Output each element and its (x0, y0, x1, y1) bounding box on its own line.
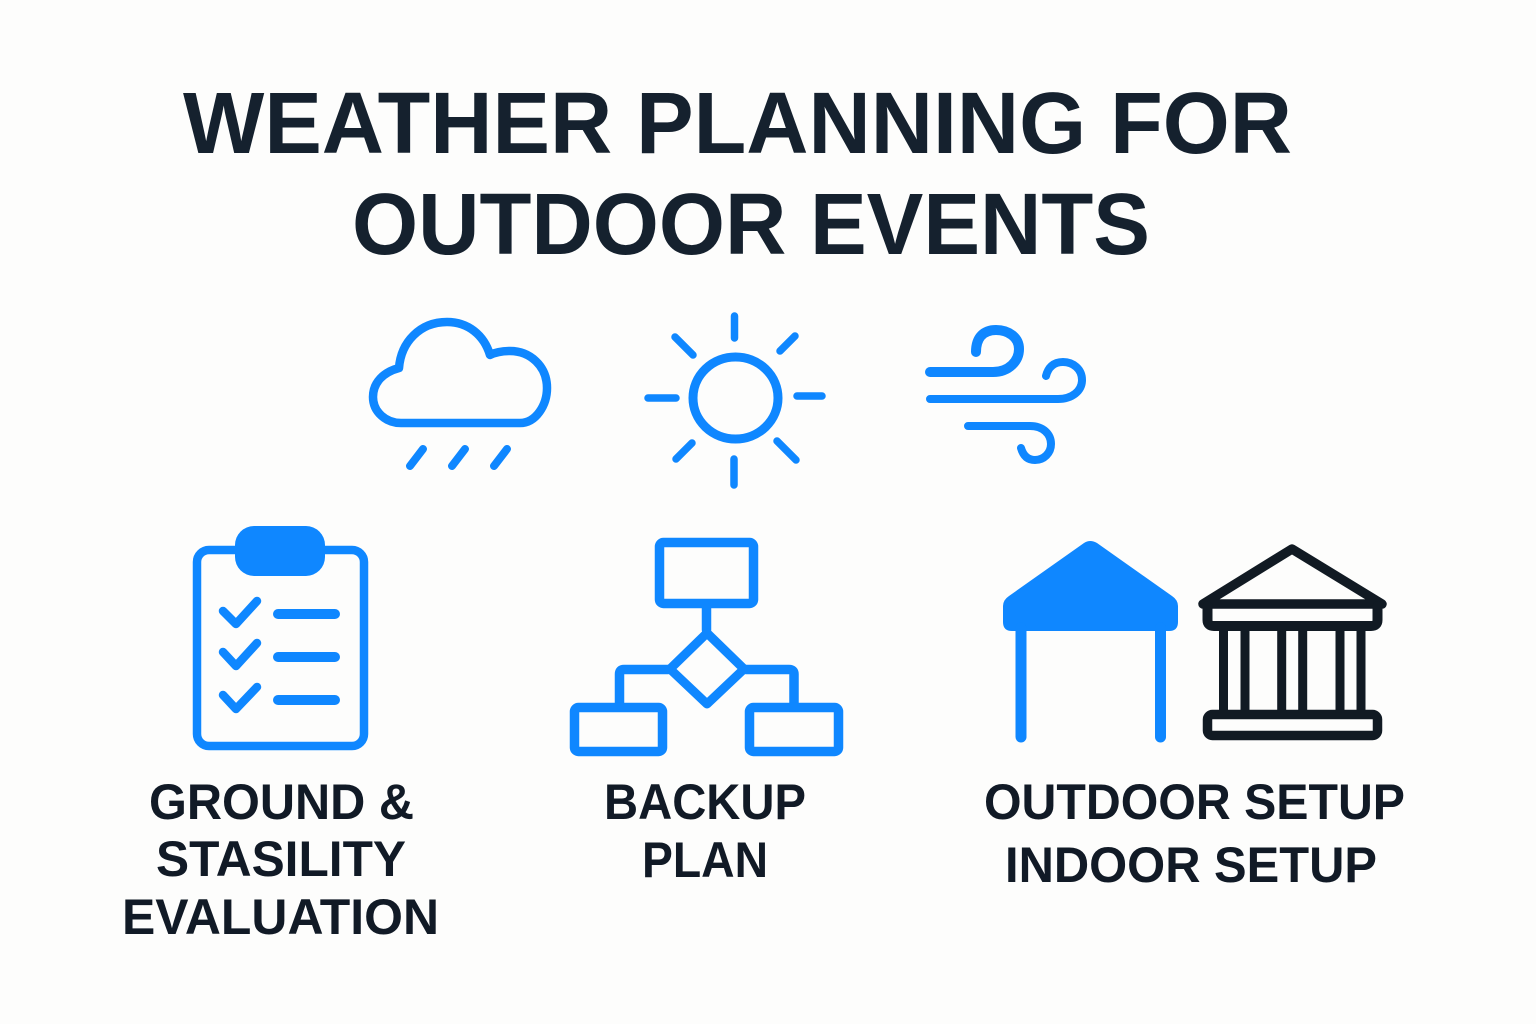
label: outdoor and indoor setup: INDOOR SETUP (1005, 837, 1377, 893)
title: OUTDOOR EVENTS (352, 176, 1150, 273)
title: WEATHER PLANNING FOR (183, 75, 1292, 172)
icon: rain cloud (373, 322, 547, 466)
icon: backup plan flowchart (574, 542, 838, 752)
title (183, 75, 1292, 273)
label: ground and stability evaluation: GROUND & (149, 774, 414, 830)
icon: clipboard checklist (197, 526, 364, 746)
icon: indoor building (1203, 549, 1382, 736)
label: backup plan (604, 774, 806, 888)
label: ground and stability evaluation (122, 774, 439, 945)
label: backup plan: PLAN (642, 832, 768, 888)
label: outdoor and indoor setup: OUTDOOR SETUP (984, 774, 1405, 830)
label: backup plan: BACKUP (604, 774, 806, 830)
icon: sun (648, 316, 822, 485)
icon: wind (930, 330, 1082, 460)
label: ground and stability evaluation: STASILITY (156, 831, 406, 887)
label: outdoor and indoor setup (984, 774, 1405, 893)
icon: outdoor tent (1003, 541, 1178, 737)
label: ground and stability evaluation: EVALUATION (122, 889, 439, 945)
